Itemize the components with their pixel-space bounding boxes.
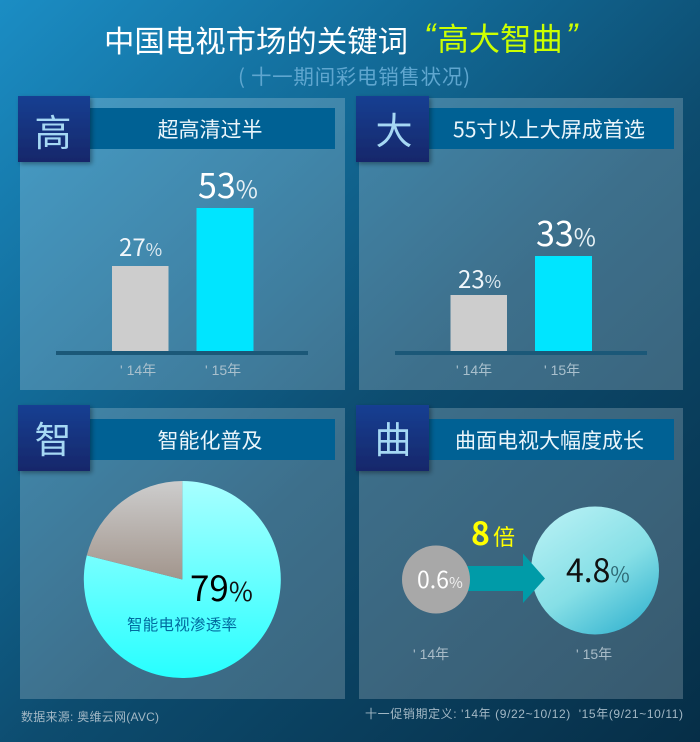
panel background	[359, 408, 683, 699]
bar 2014	[450, 295, 507, 351]
multiplier callout: 8	[471, 509, 490, 555]
subtitle: ( 十一期间彩电销售状况)	[238, 60, 470, 90]
title	[104, 15, 579, 61]
pie value: 79%	[190, 561, 253, 612]
pie slice 21%	[87, 481, 182, 580]
panel background	[20, 98, 345, 390]
header text: 55寸以上大屏成首选	[453, 114, 645, 144]
panel: 智 智能化普及	[18, 405, 345, 699]
header bar	[90, 108, 335, 149]
header text: 智能化普及	[158, 425, 262, 455]
value 2014: 23%	[458, 260, 501, 295]
title: 中国电视市场的关键词	[104, 17, 408, 61]
value 2014: 0.6%	[417, 561, 463, 595]
axis	[56, 351, 308, 355]
panel: 高 超高清过半	[18, 96, 345, 390]
pie slice 79%	[84, 481, 281, 678]
label 2014: ' 14年	[413, 646, 449, 662]
label 2014: ' 14年	[456, 362, 492, 378]
label 2015: ' 15年	[544, 362, 580, 378]
pie chart	[84, 481, 281, 678]
label 2015: ' 15年	[205, 362, 241, 378]
multiplier callout	[471, 509, 515, 555]
label 2014: ' 14年	[120, 362, 156, 378]
label 2015: ' 15年	[576, 646, 612, 662]
data source note: 数据来源: 奥维云网(AVC)	[21, 709, 159, 724]
title: “	[424, 17, 437, 55]
axis	[395, 351, 647, 355]
header bar	[429, 108, 674, 149]
header bar	[429, 419, 674, 460]
badge	[18, 405, 90, 471]
bar 2014	[112, 266, 168, 351]
value 2015: 53%	[198, 159, 258, 208]
header text: 曲面电视大幅度成长	[455, 425, 644, 455]
value 2014: 27%	[119, 228, 162, 263]
title: 高大智曲	[438, 15, 563, 60]
header text: 超高清过半	[158, 114, 262, 144]
small circle 2014	[402, 546, 470, 614]
promotion period note: 十一促销期定义: '14年 (9/22~10/12) '15年(9/21~10/11)	[365, 706, 683, 721]
badge: 大	[376, 101, 412, 155]
panel background	[359, 98, 683, 390]
bar 2015	[196, 208, 254, 351]
title: ”	[566, 17, 579, 55]
badge	[356, 405, 429, 471]
bar chart	[56, 159, 308, 378]
bar 2015	[535, 256, 592, 351]
arrow	[465, 554, 545, 603]
badge: 高	[34, 103, 72, 157]
bar chart	[395, 207, 647, 378]
multiplier callout: 倍	[493, 520, 515, 552]
value 2015: 4.8%	[566, 546, 630, 592]
pie label: 智能电视渗透率	[127, 613, 237, 635]
badge: 智	[34, 410, 72, 464]
panel background	[20, 408, 345, 699]
panel: 大 55寸以上大屏成首选	[356, 96, 683, 390]
badge: 曲	[374, 410, 412, 464]
large circle 2015	[531, 506, 659, 634]
badge	[356, 96, 429, 162]
badge	[18, 96, 90, 162]
panel: 曲 曲面电视大幅度成长	[356, 405, 683, 699]
value 2015: 33%	[536, 207, 596, 256]
header bar	[90, 419, 335, 460]
